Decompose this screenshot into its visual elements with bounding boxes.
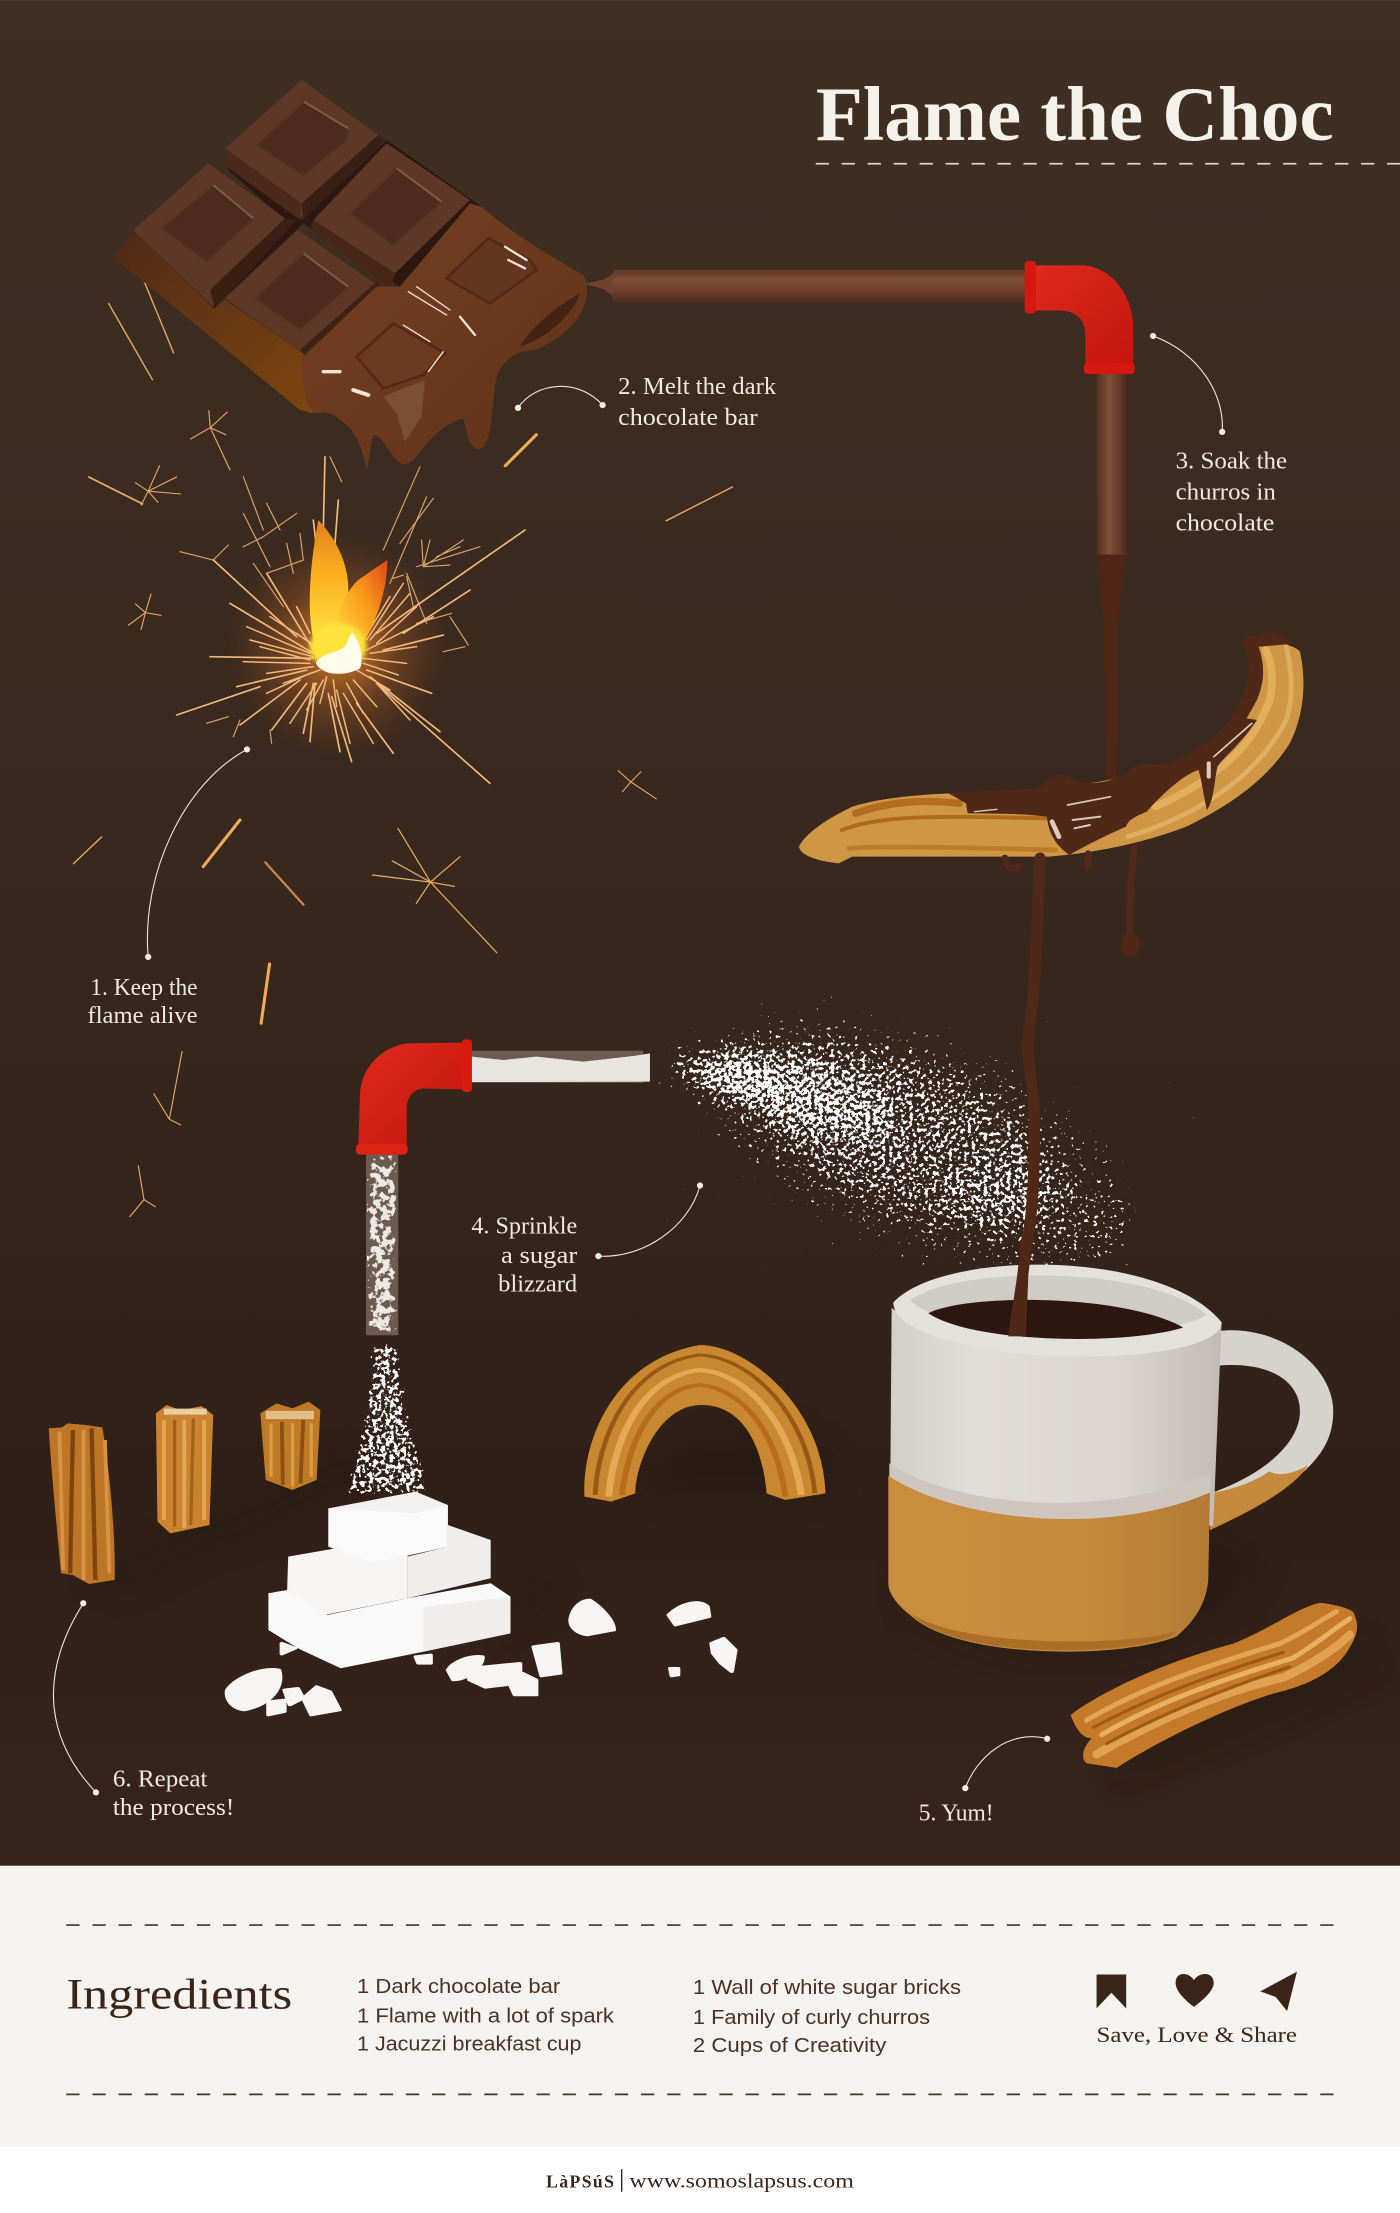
- credit footer: [0, 2147, 1400, 2213]
- leader line 6: [53, 1603, 96, 1792]
- vertical pipe: [1097, 370, 1128, 556]
- table surface: [0, 1447, 1400, 1866]
- label 1: Keep the flame alive: [88, 746, 250, 1029]
- spark glow: [228, 537, 448, 757]
- red collar horizontal: [1025, 261, 1036, 313]
- falling sugar: [346, 1344, 430, 1493]
- tube sugar fill: [472, 1053, 650, 1082]
- side drip: [1130, 847, 1135, 939]
- sugar spray: [649, 954, 1174, 1332]
- spray density: [686, 1028, 909, 1160]
- horizontal sugar tube: [472, 1051, 643, 1083]
- chocolate tile 3: [310, 143, 470, 288]
- ingredient list column 2: 1 Family of curly churros: [693, 2006, 930, 2029]
- flame right tongue: [330, 560, 387, 660]
- ingredient list column 2: 1 Wall of white sugar bricks: [693, 1976, 961, 1999]
- glossy highlights: [323, 247, 527, 395]
- label 3: Soak the churros in chocolate: churros in: [1176, 480, 1276, 506]
- melted tile recesses: [447, 238, 537, 303]
- churro body: [799, 643, 1303, 863]
- churro stick 3: [260, 1402, 320, 1490]
- flame white core: [316, 633, 362, 674]
- red collar bottom: [356, 1144, 408, 1155]
- ingredient list column 2: 2 Cups of Creativity: [693, 2034, 887, 2057]
- label 2: Melt the dark chocolate bar: chocolate bar: [618, 405, 758, 431]
- churro arch: [584, 1345, 825, 1502]
- leader line 2: [518, 386, 603, 408]
- main pour: [1018, 858, 1040, 1331]
- red elbow joint: [1034, 265, 1133, 370]
- label 2: Melt the dark chocolate bar: 2. Melt the dark: [618, 374, 776, 400]
- glaze patch: [383, 380, 425, 442]
- white footer strip: [0, 2147, 1400, 2213]
- label 3: Soak the churros in chocolate: 3. Soak the: [1176, 449, 1287, 475]
- leader line 4: [598, 1186, 700, 1256]
- falling sugar stream: [346, 1344, 430, 1493]
- mug handle glaze: [1210, 1465, 1308, 1530]
- label 4: Sprinkle a sugar blizzard: blizzard: [498, 1271, 577, 1297]
- label 2: Melt the dark chocolate bar: [515, 374, 776, 431]
- mug orange base: [888, 1476, 1210, 1652]
- pour entry: [1008, 1240, 1032, 1336]
- label 6: Repeat the process: [53, 1600, 234, 1821]
- bar side face: [115, 230, 313, 413]
- sugar cube top: [328, 1492, 448, 1563]
- label 4: Sprinkle a sugar blizzard: a sugar: [501, 1243, 577, 1269]
- sugar cube bottom: [268, 1583, 511, 1668]
- chocolate coating: [949, 633, 1297, 855]
- title: Flame the Choc: [816, 71, 1334, 157]
- label 6: Repeat the process: the process!: [113, 1795, 234, 1821]
- lying churro: [1071, 1603, 1357, 1768]
- sugar cube mid left: [287, 1548, 408, 1615]
- red collar vertical: [1084, 363, 1135, 374]
- horizontal pipe: [612, 270, 1029, 302]
- sugar tube and faucet: [356, 1039, 650, 1335]
- ingredient list column 1: [357, 1975, 615, 2056]
- mug foot: [910, 1613, 1177, 1650]
- ingredients panel: [0, 1866, 1400, 2147]
- chocolate highlights: [975, 723, 1252, 837]
- vertical sugar tube: [366, 1154, 398, 1335]
- leader line 3: [1153, 336, 1222, 432]
- spark rays: [177, 457, 525, 783]
- leader line 5: [965, 1737, 1047, 1788]
- ingredients heading: Ingredients: [66, 1970, 292, 2018]
- icon: heart: [1176, 1974, 1214, 2007]
- label 3: Soak the churros in chocolate: [1150, 333, 1287, 537]
- churro sticks, arch and sugar cubes: [49, 1345, 825, 1715]
- chocolate tile 1: [225, 80, 385, 220]
- website url: www.somoslapsus.com: [629, 2171, 854, 2193]
- mug white body: [890, 1308, 1222, 1526]
- flame left tongue: [310, 520, 348, 658]
- sparkler burst: [177, 457, 525, 783]
- churro silhouette: [1071, 1603, 1357, 1768]
- melted chocolate: [300, 203, 587, 470]
- ingredient list column 1: 1 Jacuzzi breakfast cup: [357, 2033, 581, 2056]
- mug inner: [910, 1275, 1207, 1335]
- churro ridges: [842, 647, 1291, 850]
- label 1: Keep the flame alive: flame alive: [88, 1003, 198, 1029]
- small drips: [1005, 854, 1088, 868]
- red elbow body: [358, 1043, 463, 1148]
- chocolate tile 4: [225, 230, 380, 353]
- chocolate tile 2: [133, 163, 297, 308]
- brown chocolate pipe: [584, 261, 1135, 779]
- sugar crumbs: [227, 1600, 735, 1715]
- pipe nozzle: [584, 272, 615, 298]
- ingredient list column 1: 1 Flame with a lot of spark: [357, 2004, 615, 2027]
- churro stick 1: [49, 1423, 115, 1584]
- churro ridges: [1087, 1611, 1350, 1754]
- vertical tube sugar: [367, 1155, 397, 1334]
- panel background: [0, 1866, 1400, 2147]
- chocolate drips and pour into mug: [1005, 847, 1140, 1331]
- coffee mug: [888, 1240, 1333, 1652]
- churro dipped in chocolate: [799, 633, 1303, 863]
- lapsus logo: LàPSúS: [546, 2172, 614, 2192]
- ingredient list column 1: 1 Dark chocolate bar: [357, 1975, 560, 1998]
- save love share caption: Save, Love & Share: [1097, 2022, 1297, 2047]
- sugar cube mid right: [408, 1525, 491, 1598]
- leader line 1: [147, 749, 247, 957]
- label 5: Yum: 5. Yum!: [919, 1801, 994, 1827]
- drip bulb: [1121, 932, 1140, 957]
- mug glaze band: [889, 1463, 1211, 1519]
- flame yellow base: [310, 623, 367, 670]
- label 4: Sprinkle a sugar blizzard: [471, 1182, 703, 1297]
- title dashed rule: [816, 163, 1400, 165]
- red collar right: [462, 1039, 472, 1092]
- churro stick 2: [156, 1405, 213, 1533]
- stray spark streaks: [73, 257, 732, 1217]
- spray root: [649, 1051, 790, 1108]
- label 5: Yum: [919, 1736, 1050, 1827]
- icon: bookmark: [1097, 1974, 1126, 2008]
- icon: paper plane: [1260, 1972, 1297, 2011]
- label 4: Sprinkle a sugar blizzard: 4. Sprinkle: [471, 1214, 577, 1240]
- label 3: Soak the churros in chocolate: chocolate: [1176, 511, 1274, 537]
- table shadows: [85, 1425, 1390, 1785]
- ingredient list column 2: [693, 1976, 961, 2057]
- bar groove: [207, 140, 482, 308]
- mug rim: [893, 1265, 1222, 1357]
- mug handle: [1210, 1330, 1333, 1530]
- hot chocolate surface: [928, 1300, 1183, 1339]
- label 1: Keep the flame alive: 1. Keep the: [90, 975, 198, 1001]
- falling chocolate stream: [1098, 555, 1126, 779]
- chocolate bar: [115, 80, 587, 470]
- melted shadow facets: [520, 293, 580, 347]
- label 6: Repeat the process: 6. Repeat: [113, 1767, 208, 1793]
